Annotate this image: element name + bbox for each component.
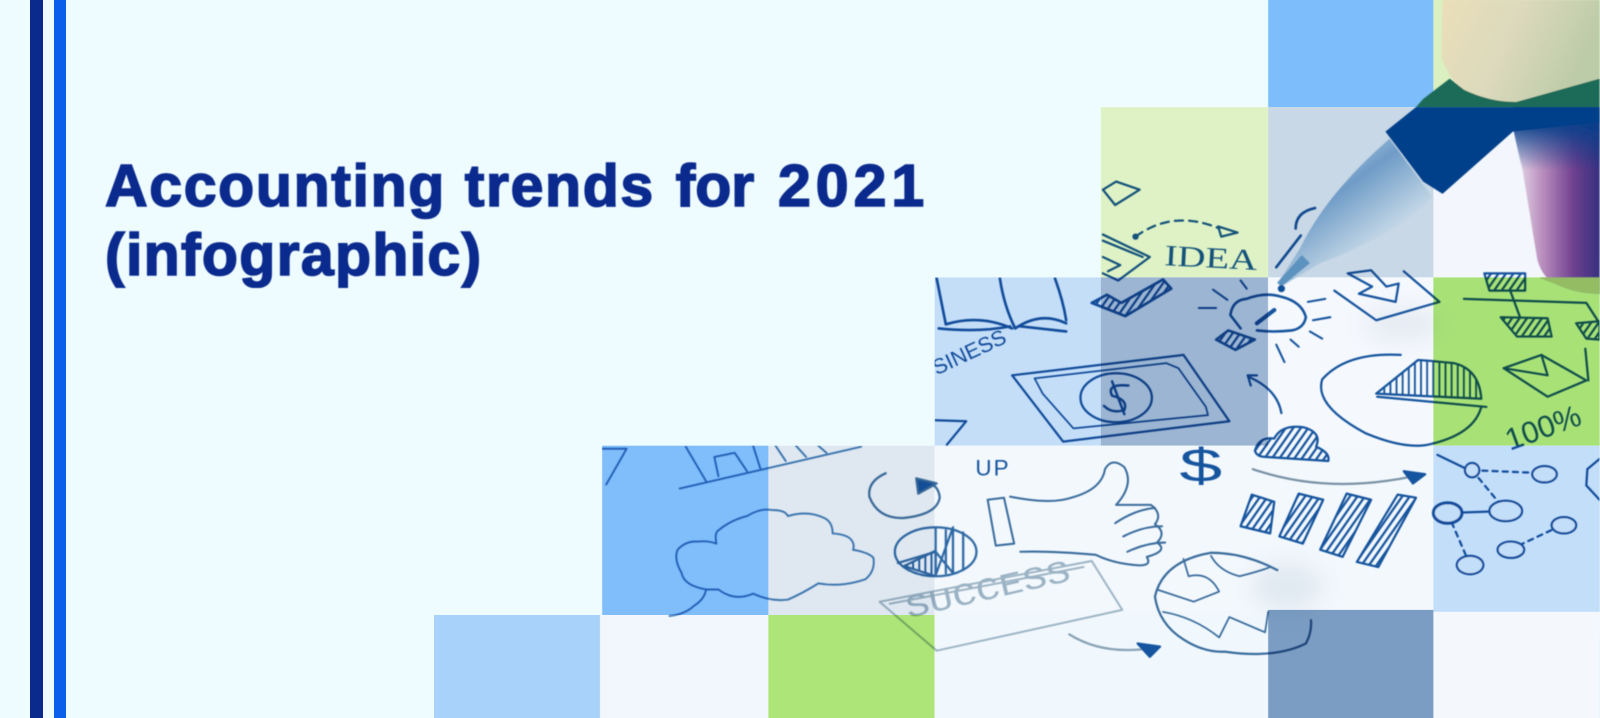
icon: loop arrow bbox=[869, 473, 940, 518]
pen point bbox=[1278, 285, 1285, 292]
pen tip metal bbox=[1277, 255, 1310, 287]
title bbox=[104, 153, 929, 289]
title: Accounting trends for 2021 bbox=[105, 153, 929, 219]
paper sheet under the mosaic bbox=[434, 0, 1600, 718]
icon: bottom arrow bbox=[1069, 634, 1160, 657]
icon: success banner: SUCCESS bbox=[902, 556, 1074, 628]
icon: document bbox=[1103, 235, 1150, 280]
icon: molecule network bbox=[1433, 455, 1600, 574]
icon: open book bbox=[937, 278, 1066, 331]
finger lower bbox=[1513, 110, 1600, 294]
double vertical accent bars bbox=[30, 0, 66, 718]
icon: sparkline chart doodle bbox=[602, 446, 861, 489]
icon: small pie bbox=[895, 527, 976, 576]
hero collage: mosaic, doodles and pen bbox=[434, 0, 1600, 718]
text: IDEA: IDEA bbox=[1164, 240, 1259, 277]
icon: loop by pen bbox=[1276, 208, 1315, 267]
icon: download arrow box bbox=[1334, 270, 1439, 320]
icon: globe bbox=[1155, 553, 1311, 654]
pen barrel green part bbox=[1416, 79, 1600, 107]
mosaic tiles bbox=[434, 0, 1600, 718]
hand and pen bbox=[1277, 0, 1600, 294]
icon: check mark bbox=[1092, 279, 1171, 316]
icon: dashed arc to idea bbox=[1134, 220, 1238, 239]
text: up: UP bbox=[975, 455, 1011, 480]
text: dollar sign: $ bbox=[1179, 439, 1222, 491]
title: (infographic) bbox=[105, 222, 482, 288]
finger lower tint on green tile bbox=[1539, 277, 1600, 294]
icon: gem bbox=[1103, 182, 1140, 205]
icon: success banner bbox=[880, 556, 1122, 651]
icon: thought cloud bbox=[669, 510, 874, 616]
soft paper shadows bbox=[1252, 310, 1442, 611]
pen cone bbox=[1277, 139, 1432, 287]
icon: long arrow bbox=[1253, 469, 1425, 484]
text: 100%: 100% bbox=[1501, 399, 1586, 457]
icon: banknote bbox=[1012, 355, 1229, 442]
text: business: SINESS bbox=[929, 325, 1010, 380]
finger upper bbox=[1442, 0, 1600, 102]
bar chart doodle bbox=[1241, 494, 1416, 567]
icon: envelope bbox=[1504, 349, 1588, 397]
icon: curved arrow bbox=[1248, 375, 1281, 413]
icon: hatched cloud bbox=[1255, 427, 1329, 461]
finger shadow under the barrel bbox=[1513, 107, 1600, 170]
icon: flow chart bbox=[1464, 273, 1600, 340]
icon: small triangle bbox=[936, 420, 966, 445]
icon: pie chart bbox=[1321, 355, 1486, 446]
icon: thumbs up hand bbox=[988, 462, 1165, 565]
icon: lightbulb bbox=[1199, 280, 1330, 362]
pen barrel navy part bbox=[1385, 107, 1600, 194]
hand-drawn doodles bbox=[602, 182, 1600, 657]
